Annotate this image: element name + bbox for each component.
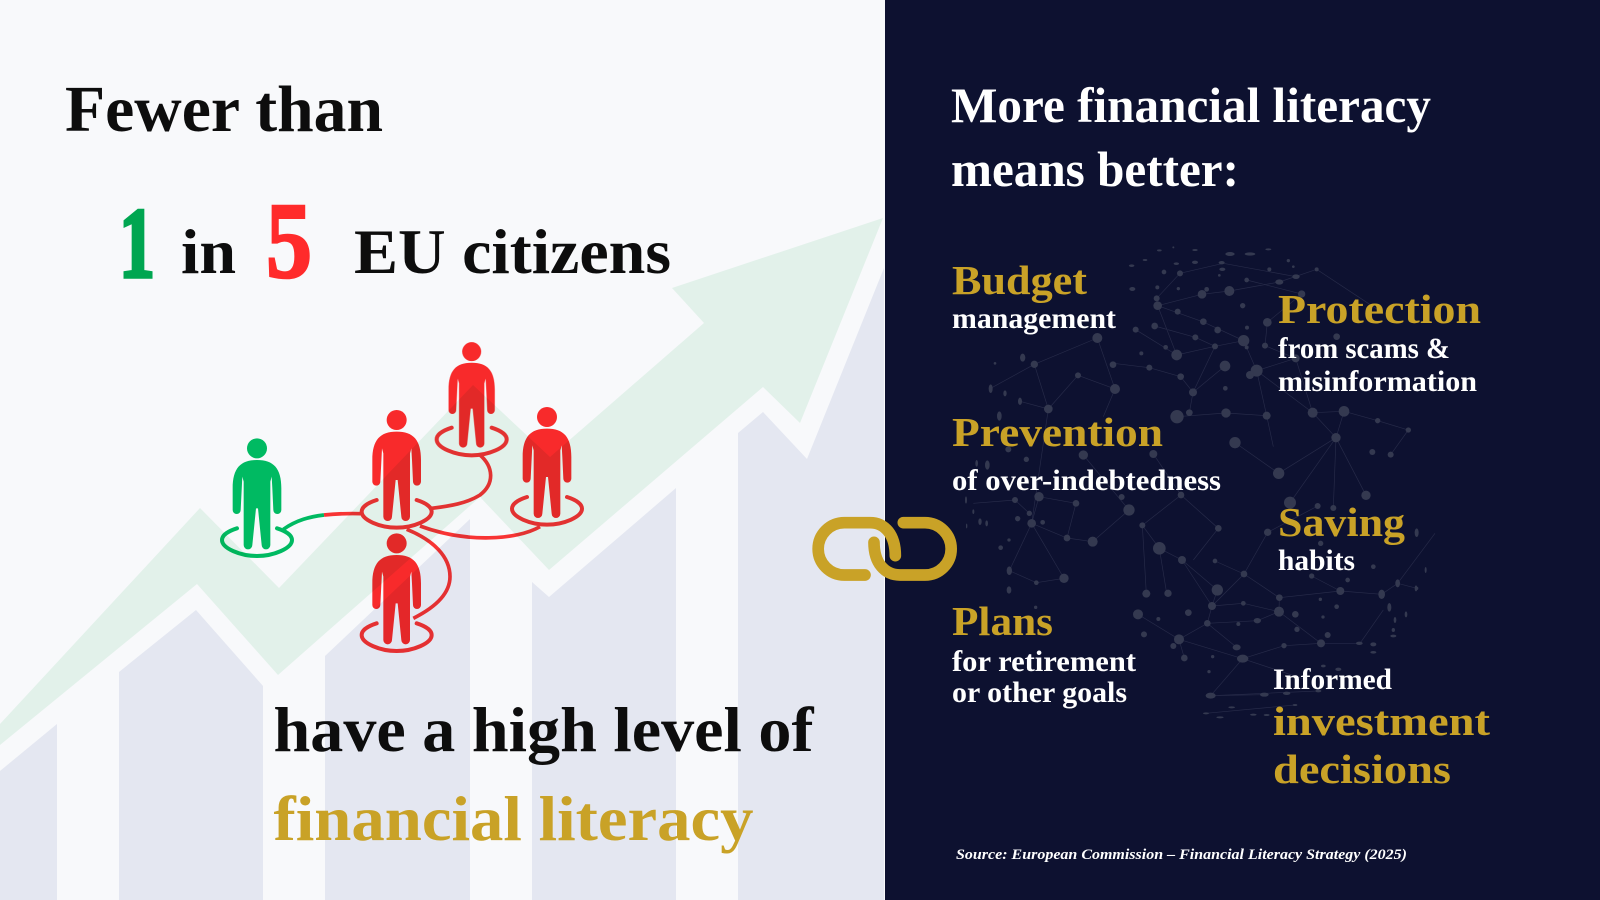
icon: top red person <box>437 342 507 455</box>
item: saving habits: habits <box>1278 544 1355 577</box>
item: prevention: Prevention <box>952 409 1163 455</box>
text: financial literacy: financial literacy <box>274 783 754 854</box>
item: prevention <box>952 409 1221 497</box>
text: have a high level of financial literacy <box>274 694 814 854</box>
illustration: people network <box>222 342 582 651</box>
item: saving habits: Saving <box>1278 499 1406 545</box>
chart: background rising arrow <box>0 218 883 745</box>
text: EU citizens: EU citizens <box>354 217 671 287</box>
connector: green to centre <box>283 515 324 529</box>
heading: more financial literacy means better: More financial literacy <box>951 77 1431 133</box>
icon: green person <box>222 438 292 556</box>
title: fewer than: Fewer than <box>65 73 383 146</box>
item: plans: or other goals <box>952 676 1127 709</box>
icon: right red person <box>512 407 582 525</box>
text: have a high level of: have a high level of <box>274 694 814 765</box>
connector: red links <box>324 455 540 618</box>
icon: bottom red person <box>362 533 432 651</box>
text: in: in <box>181 217 236 287</box>
item: budget management: management <box>952 302 1116 335</box>
item: protection <box>1278 286 1481 398</box>
panel: left background <box>0 0 885 900</box>
heading: more financial literacy means better <box>951 77 1431 197</box>
item: budget management: Budget <box>952 257 1087 303</box>
item: budget management <box>952 257 1116 335</box>
panel: right dark background <box>885 0 1600 900</box>
number: 1: 1 <box>119 187 155 299</box>
heading: more financial literacy means better: means better: <box>951 141 1239 197</box>
item: informed investment decisions <box>1273 663 1490 792</box>
chart: background rising bars <box>0 268 884 900</box>
item: plans <box>952 598 1136 709</box>
item: prevention: of over-indebtedness <box>952 464 1221 497</box>
item: protection: misinformation <box>1278 365 1477 398</box>
item: saving habits <box>1278 499 1406 577</box>
item: protection: from scams & <box>1278 332 1450 365</box>
item: informed investment decisions: decisions <box>1273 746 1451 792</box>
item: informed investment decisions: investment <box>1273 698 1490 744</box>
item: plans: Plans <box>952 598 1053 644</box>
headline: 1 in 5 EU citizens <box>119 182 671 301</box>
icon: gold chain link <box>818 523 951 575</box>
number: 5: 5 <box>266 182 312 301</box>
item: informed investment decisions: Informed <box>1273 663 1392 696</box>
illustration: network globe <box>965 246 1435 718</box>
source note: Source: European Commission – Financial Literacy Strategy (2025) <box>956 847 1407 863</box>
icon: centre red person <box>362 410 432 528</box>
item: plans: for retirement <box>952 645 1136 678</box>
item: protection: Protection <box>1278 286 1481 332</box>
